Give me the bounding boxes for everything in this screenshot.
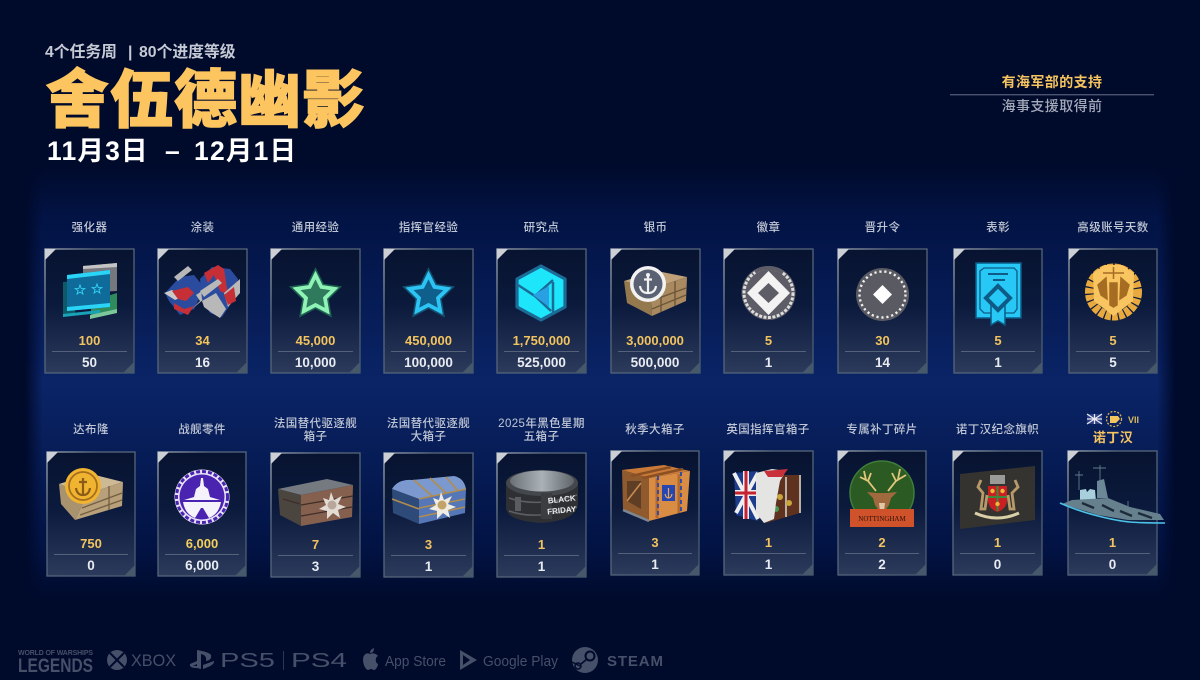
icon: french destroyer large chest <box>392 476 466 524</box>
card: 法国替代驱逐舰箱子: 7 <box>312 537 319 552</box>
icon: badge <box>742 266 796 320</box>
logo: ps5 <box>190 650 275 672</box>
card: 达布隆: 0 <box>87 558 95 573</box>
card: 诺丁汉纪念旗帜: 诺丁汉纪念旗帜 <box>956 422 1039 436</box>
card: 通用经验 <box>271 220 360 373</box>
card: 指挥官经验 <box>384 220 473 373</box>
card: 高级账号天数: 5 <box>1109 355 1117 370</box>
icon: green star <box>296 275 334 311</box>
icon: nottingham patch <box>850 461 914 527</box>
logo: xbox: XBOX <box>131 651 176 670</box>
card: 法国替代驱逐舰箱子 <box>271 416 360 577</box>
card: 银币 <box>611 220 700 373</box>
card: 英国指挥官箱子: 1 <box>765 535 772 550</box>
card: 诺丁汉纪念旗帜: 0 <box>994 557 1001 572</box>
icon: autumn crate <box>622 465 690 521</box>
ship name: 诺丁汉 <box>1093 430 1133 445</box>
card: 达布隆 <box>47 422 135 576</box>
dates: 11月3日 <box>47 136 149 166</box>
card: 2025年黑色星期五箱子: 1 <box>538 537 545 552</box>
logo: app store <box>363 648 446 670</box>
card: 高级账号天数 <box>1069 220 1157 373</box>
icon: camouflage <box>164 265 240 318</box>
card: 强化器 <box>45 220 134 373</box>
icon: french destroyer crate <box>278 479 353 526</box>
icon: commendation <box>976 263 1021 325</box>
card: 指挥官经验: 100,000 <box>404 355 453 370</box>
logo: legends <box>18 650 93 677</box>
admiralty support note <box>950 74 1154 114</box>
icon: premium wreath <box>1090 265 1138 316</box>
card: 研究点: 研究点 <box>524 220 559 234</box>
card: 诺丁汉 ship <box>1060 412 1165 575</box>
dates: – <box>165 136 181 166</box>
card: 通用经验: 通用经验 <box>292 220 339 234</box>
icon: blue star <box>410 275 448 311</box>
card: 英国指挥官箱子: 1 <box>765 557 773 572</box>
icon: silver crate <box>624 266 687 316</box>
logo: ps4: PS4 <box>291 650 347 672</box>
card: 英国指挥官箱子 <box>724 422 813 575</box>
logo: ps5: PS5 <box>220 650 275 672</box>
card: 银币: 500,000 <box>631 355 679 370</box>
card: 法国替代驱逐舰箱子: 箱子 <box>304 429 327 443</box>
card: 秋季大箱子: 秋季大箱子 <box>625 422 685 436</box>
card: 涂装: 16 <box>195 355 210 370</box>
card: 诺丁汉纪念旗帜: 1 <box>994 535 1001 550</box>
icon: booster flags <box>63 263 117 319</box>
card: 晋升令: 晋升令 <box>865 220 900 234</box>
logo: steam: STEAM <box>607 653 663 670</box>
card: 强化器: 100 <box>79 333 100 348</box>
card: 表彰: 5 <box>994 333 1002 348</box>
card: 专属补丁碎片: 2 <box>878 557 886 572</box>
logo: google play <box>460 650 558 670</box>
card: 战舰零件 <box>158 422 246 576</box>
icon: ship <box>1060 465 1165 523</box>
ship tier marker <box>1087 412 1139 426</box>
card: 战舰零件: 6,000 <box>185 558 219 573</box>
title: 舍伍德幽影 <box>46 66 366 136</box>
logo: legends: WORLD OF WARSHIPS <box>18 650 93 657</box>
card: 诺丁汉 ship: 1 <box>1109 535 1116 550</box>
card: 徽章: 徽章 <box>757 220 780 234</box>
subtitle: 80个进度等级 <box>139 42 236 61</box>
card: 专属补丁碎片: 2 <box>878 535 886 550</box>
black friday lettering: BLACK <box>547 494 576 505</box>
card: 诺丁汉 ship: 0 <box>1109 557 1116 572</box>
card: 银币: 3,000,000 <box>626 333 684 348</box>
card: 涂装: 34 <box>195 333 210 348</box>
card: 强化器: 50 <box>82 355 97 370</box>
card: 秋季大箱子: 3 <box>651 535 659 550</box>
card: 2025年黑色星期五箱子 <box>497 416 586 577</box>
card: 徽章 <box>724 220 813 373</box>
card: 通用经验: 45,000 <box>296 333 335 348</box>
card: 指挥官经验: 指挥官经验 <box>399 220 458 234</box>
blue background band <box>25 165 1175 600</box>
card: 英国指挥官箱子: 英国指挥官箱子 <box>726 422 810 436</box>
card: 涂装 <box>158 220 247 373</box>
logo: google play: Google Play <box>483 653 558 670</box>
card: 研究点 <box>497 220 586 373</box>
card: 专属补丁碎片: 专属补丁碎片 <box>846 422 918 436</box>
banner text: NOTTINGHAM <box>858 515 906 523</box>
icon: promotion order <box>856 268 909 321</box>
logo: xbox <box>107 650 176 670</box>
card: 诺丁汉纪念旗帜 <box>953 422 1042 575</box>
icon: british commander crate <box>734 469 800 523</box>
card: 研究点: 525,000 <box>517 355 566 370</box>
card: 战舰零件: 6,000 <box>186 536 218 551</box>
icon: research hexagon <box>517 266 565 320</box>
logo: steam <box>572 647 663 673</box>
ship tier marker: VII <box>1128 415 1139 425</box>
card: 徽章: 5 <box>765 333 772 348</box>
card: 晋升令: 14 <box>875 355 890 370</box>
header: season info <box>45 42 366 166</box>
card: 2025年黑色星期五箱子: 1 <box>538 559 546 574</box>
icon: commemorative flag <box>960 466 1035 529</box>
card: 达布隆: 达布隆 <box>73 422 109 436</box>
black friday lettering: FRIDAY <box>547 504 577 517</box>
footer platform logos <box>18 647 663 677</box>
card: 法国替代驱逐舰大箱子: 法国替代驱逐舰 <box>387 416 470 430</box>
icon: black friday drum <box>506 470 578 523</box>
card: 达布隆: 750 <box>80 536 102 551</box>
card: 晋升令 <box>838 220 927 373</box>
card: 研究点: 1,750,000 <box>513 333 570 348</box>
card: 法国替代驱逐舰大箱子: 1 <box>425 559 433 574</box>
card: 法国替代驱逐舰箱子: 法国替代驱逐舰 <box>274 416 357 430</box>
card: 通用经验: 10,000 <box>295 355 336 370</box>
card: 秋季大箱子 <box>611 422 699 575</box>
card: 法国替代驱逐舰箱子: 3 <box>312 559 320 574</box>
card: 指挥官经验: 450,000 <box>405 333 452 348</box>
card: 秋季大箱子: 1 <box>651 557 659 572</box>
icon: doubloon crate <box>59 468 123 520</box>
card: 表彰: 1 <box>994 355 1002 370</box>
card: 2025年黑色星期五箱子: 2025年黑色星期 <box>498 416 585 430</box>
card: 法国替代驱逐舰大箱子: 3 <box>425 537 432 552</box>
card: 法国替代驱逐舰大箱子 <box>384 416 473 577</box>
card: 表彰: 表彰 <box>986 220 1010 234</box>
card: 强化器: 强化器 <box>72 220 107 234</box>
card: 银币: 银币 <box>644 220 667 234</box>
card: 晋升令: 30 <box>875 333 890 348</box>
subtitle: 4个任务周 <box>45 42 117 61</box>
card: 徽章: 1 <box>765 355 773 370</box>
card: 2025年黑色星期五箱子: 五箱子 <box>524 429 559 443</box>
black friday lettering <box>547 494 577 517</box>
support subtext: 海事支援取得前 <box>1002 98 1102 114</box>
card: 涂装: 涂装 <box>191 220 214 234</box>
card: 高级账号天数: 高级账号天数 <box>1077 220 1149 234</box>
logo: app store: App Store <box>385 653 446 670</box>
icon: ship parts <box>174 470 230 524</box>
support heading: 有海军部的支持 <box>1002 74 1102 90</box>
card: 表彰 <box>954 220 1042 373</box>
card: 专属补丁碎片 <box>838 422 926 575</box>
card: 战舰零件: 战舰零件 <box>178 422 226 436</box>
subtitle: | <box>128 44 132 61</box>
card: 法国替代驱逐舰大箱子: 大箱子 <box>411 429 446 443</box>
dates: 12月1日 <box>194 136 297 166</box>
card: 高级账号天数: 5 <box>1109 333 1117 348</box>
logo: legends: LEGENDS <box>18 656 93 677</box>
